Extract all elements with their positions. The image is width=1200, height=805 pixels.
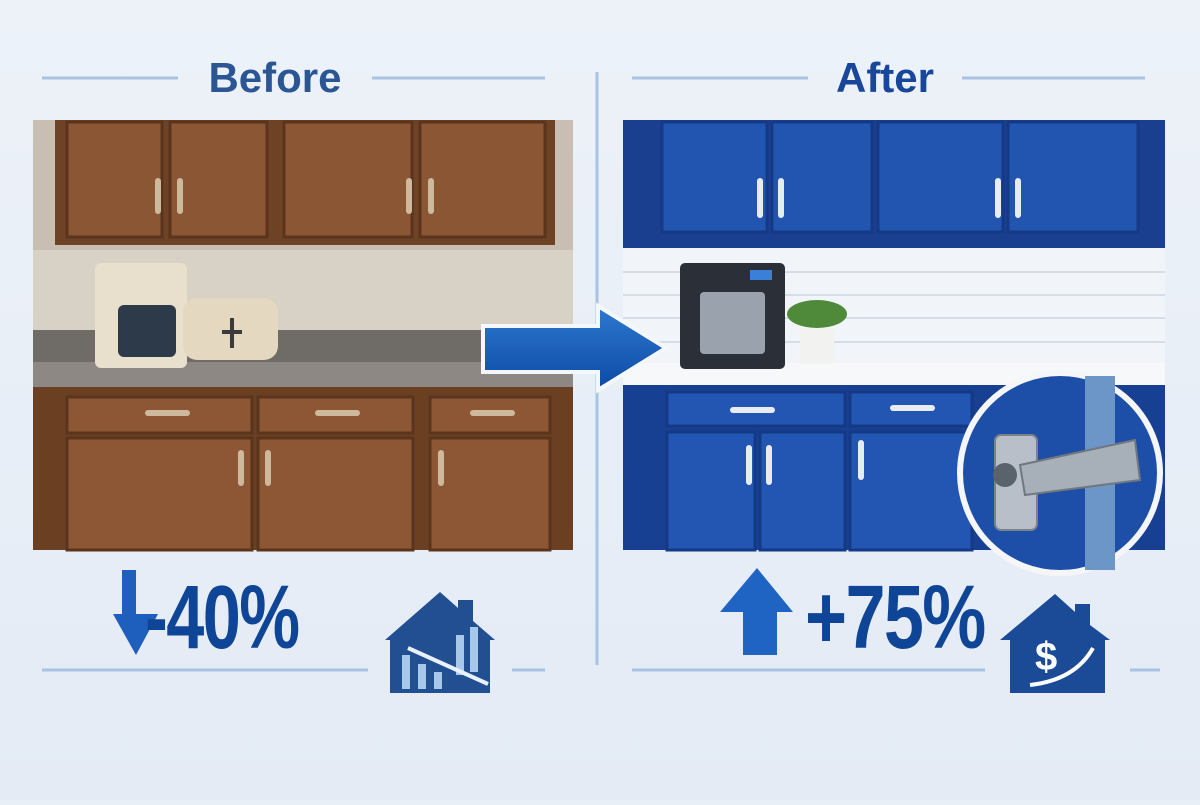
divider lines — [42, 72, 1160, 670]
callout: hinge inset — [960, 373, 1160, 573]
stat: -40%: -40% — [145, 567, 299, 667]
title: After: After — [836, 54, 934, 101]
arrow: before to after — [483, 306, 666, 390]
stat: +75% — [720, 567, 985, 668]
panel: before kitchen — [33, 120, 573, 550]
title: Before: Before — [208, 54, 342, 101]
panel: after kitchen — [623, 120, 1165, 573]
icon: house falling — [385, 592, 495, 693]
stat: +75%: +75% — [805, 567, 985, 668]
icon: house rising value — [1000, 594, 1110, 693]
icon: house rising value: $ — [1035, 635, 1057, 679]
